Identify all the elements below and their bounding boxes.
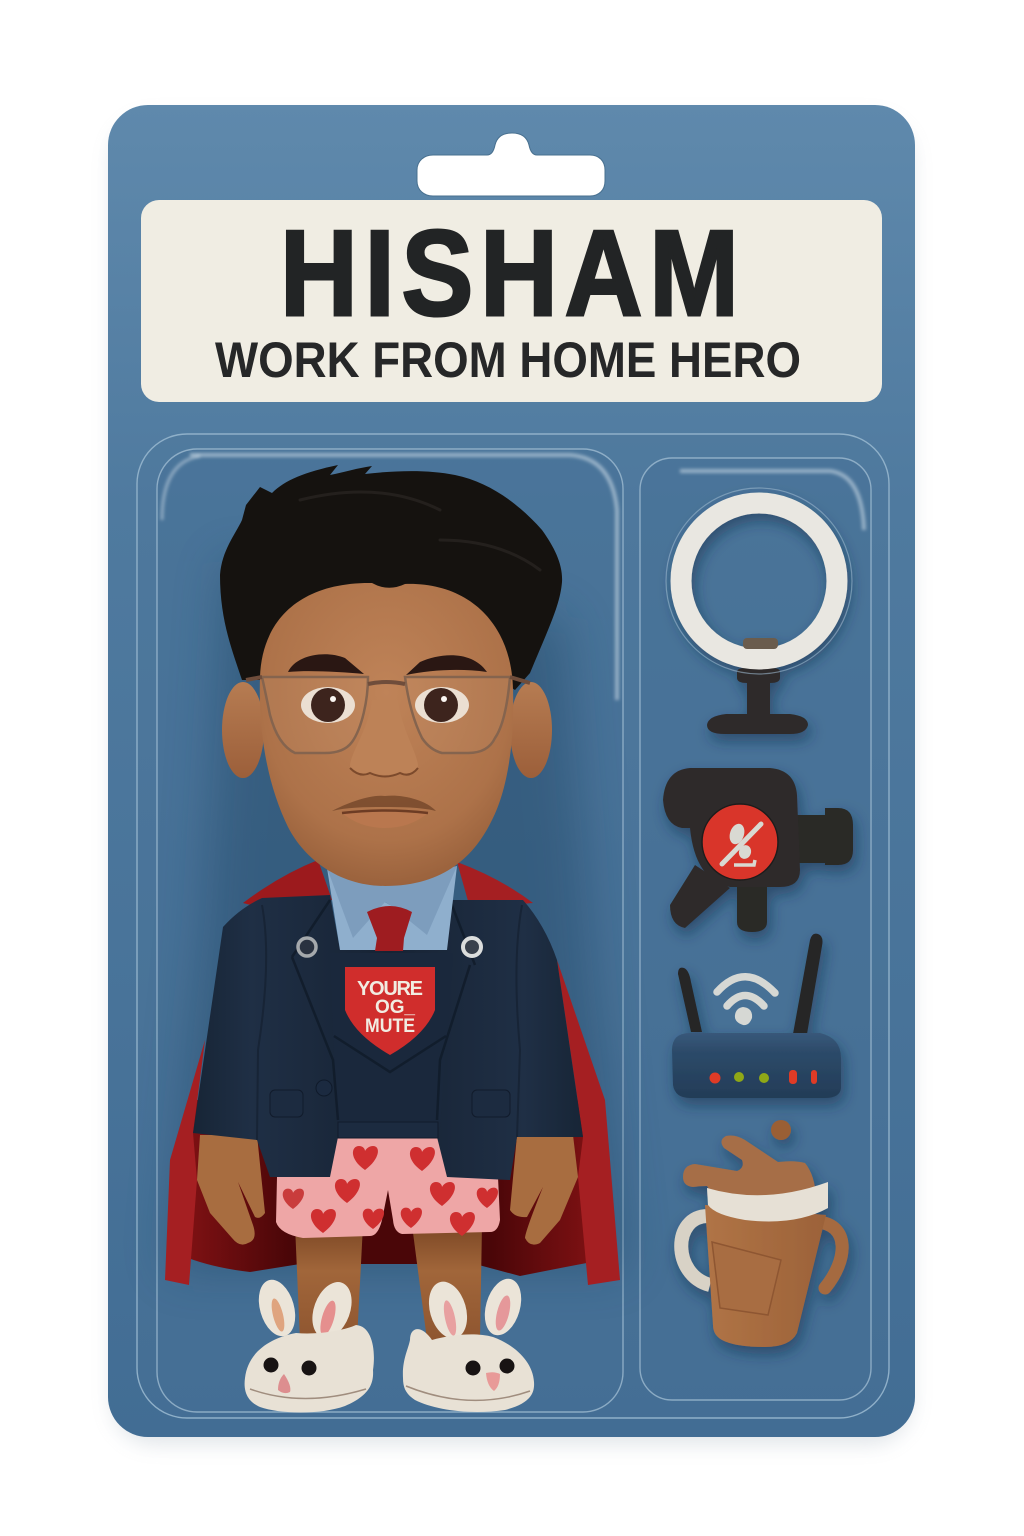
left leg	[295, 1225, 363, 1340]
left hand	[197, 1135, 265, 1245]
sweater v-neck panel	[330, 953, 453, 1127]
red mute button	[702, 804, 778, 880]
right ear	[510, 682, 552, 778]
lapel lines	[292, 900, 475, 1120]
stand	[707, 668, 808, 734]
boxer shorts with hearts	[276, 1135, 500, 1238]
shield badge: YOURE	[357, 978, 423, 1000]
jacket pocket left	[270, 1090, 303, 1117]
panel: clear blister outer shell	[137, 434, 889, 1418]
hair	[220, 465, 562, 690]
red cape	[165, 860, 620, 1285]
left ear	[222, 682, 264, 778]
panel: blister tray, accessories bay	[640, 458, 871, 1400]
glasses	[246, 677, 530, 753]
left bunny slipper	[245, 1275, 374, 1412]
right hand	[510, 1135, 578, 1245]
sweater hem	[338, 1122, 438, 1138]
face	[260, 583, 513, 886]
collar shadow	[327, 866, 457, 938]
figure: Hisham	[165, 465, 625, 1412]
ring glass halo	[666, 488, 852, 674]
jacket button	[316, 1080, 332, 1096]
right eyebrow	[406, 655, 487, 675]
jacket pocket right	[472, 1090, 510, 1117]
right eye	[415, 687, 469, 723]
icon: ring light	[681, 503, 837, 734]
subtitle: WORK FROM HOME HERO	[215, 332, 801, 388]
icon: muted camera	[663, 768, 853, 932]
light blue shirt collar	[327, 866, 457, 950]
right bunny slipper	[403, 1274, 534, 1412]
left eye	[301, 687, 355, 723]
icon: coffee sippy cup	[681, 1120, 842, 1347]
right pin	[463, 938, 481, 956]
heading: name: HISHAM	[280, 206, 746, 342]
right leg	[412, 1225, 482, 1340]
hang hole	[417, 133, 605, 196]
mount knob	[743, 638, 778, 649]
panel: blister tray, figure bay	[157, 449, 623, 1412]
mouth	[342, 810, 428, 828]
shield badge: OG_	[375, 997, 415, 1018]
shield badge	[345, 967, 435, 1055]
nose	[350, 700, 418, 776]
figure shadow	[170, 560, 625, 1270]
red tie	[367, 906, 412, 951]
left pin	[298, 938, 316, 956]
card soft shadow	[112, 118, 912, 1444]
shield badge: MUTE	[365, 1016, 415, 1037]
panel: blue backing card	[108, 105, 915, 1437]
left eyebrow	[288, 654, 364, 674]
moustache	[332, 796, 436, 811]
panel: name label	[141, 200, 882, 402]
icon: wifi signal	[717, 977, 775, 1025]
navy jacket	[193, 895, 583, 1180]
icon: wifi router	[672, 934, 841, 1098]
